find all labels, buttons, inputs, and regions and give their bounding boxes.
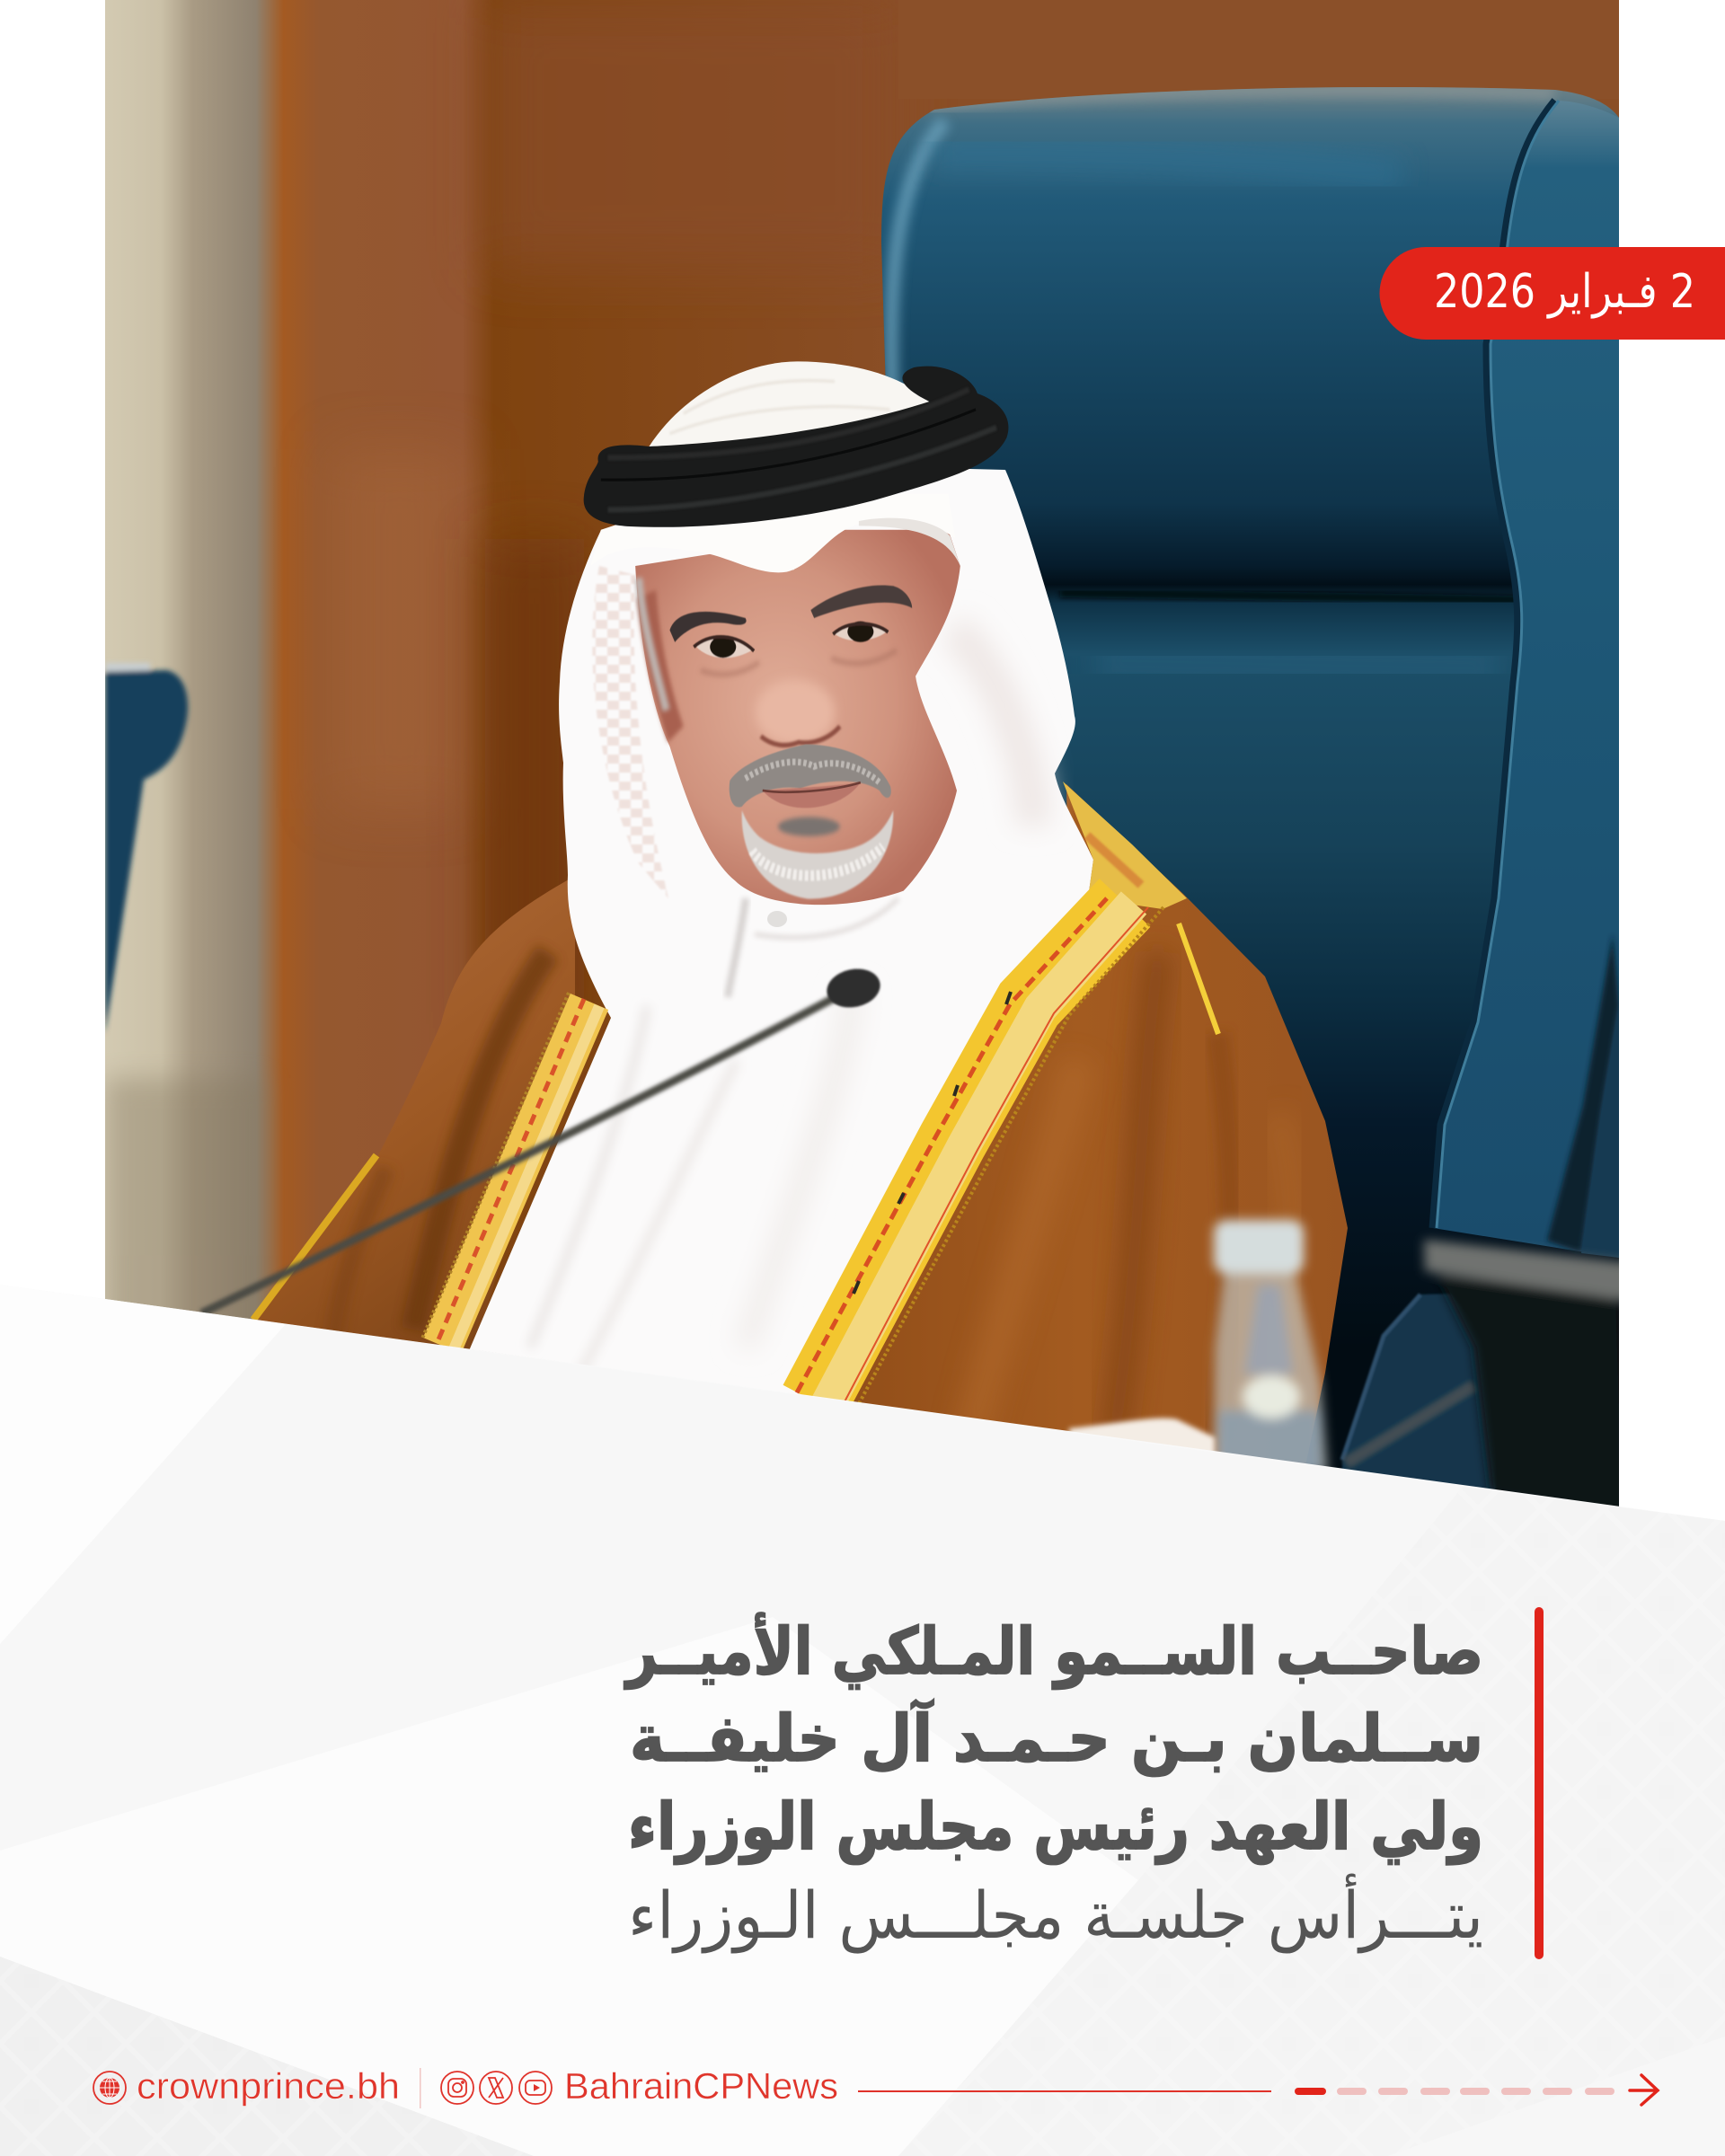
lower text panel: [0, 1285, 1725, 2156]
chair side panel and stitched seam: [1433, 101, 1619, 1258]
right eye: [833, 622, 888, 642]
left background chair arm: [105, 663, 188, 1033]
grey moustache: [730, 745, 891, 808]
gold trim, right side: [796, 782, 1187, 1410]
left eye: [694, 636, 754, 658]
white ghutra and thobe: [449, 467, 1093, 1455]
blue leather chair back: [881, 87, 1619, 1527]
face and head, drawn in zoomed local coordinates: [584, 361, 1008, 905]
eyebrows: [669, 612, 747, 642]
website: crownprince.bh: [137, 2065, 400, 2107]
soul patch: [778, 817, 840, 836]
footer bar: [93, 2065, 1658, 2108]
headline line 2: ســلمان بـن حـمـد آل خليفــة: [630, 1699, 1483, 1777]
left temple shadow and sideburn: [637, 590, 684, 742]
forehead ghutra fold: [600, 525, 951, 573]
microphone: [201, 964, 884, 1313]
lips: [763, 782, 861, 808]
skin: [635, 530, 960, 905]
headline block: [624, 1607, 1544, 1959]
wood and cream wall background: [105, 0, 1619, 1353]
icon: x: [480, 2072, 512, 2104]
lower chair section: [1342, 1294, 1496, 1491]
headline line 3: ولي العهد رئيس مجلس الوزراء: [628, 1789, 1483, 1865]
headline line 4: يتـــرأس جلسـة مجلـــس الـوزراء: [628, 1873, 1483, 1954]
black agal ring: [584, 367, 1008, 527]
nose: [756, 680, 835, 745]
date badge: [1380, 247, 1725, 340]
panel shards: [0, 1285, 286, 1644]
red accent bar: [1535, 1607, 1544, 1959]
date text: 2 فـبراير 2026: [1434, 265, 1695, 319]
photo: crown prince seated in blue chair: [105, 0, 1635, 1527]
page progress dashes: [1295, 2088, 1614, 2095]
white paper on table: [1069, 1418, 1215, 1473]
gold trim, left side: [422, 993, 599, 1349]
arrow: [1630, 2075, 1658, 2105]
white head dome: [649, 361, 929, 446]
dark monitor in foreground: [1424, 1240, 1631, 1518]
headline line 1: صاحــب الســمو المـلكي الأميــر: [624, 1612, 1483, 1690]
social handle: BahrainCPNews: [564, 2065, 838, 2107]
footer line: [858, 2090, 1271, 2092]
brown bisht robe, left side: [250, 880, 575, 1349]
icon: youtube: [519, 2072, 552, 2104]
water bottle, blurred: [1213, 1220, 1328, 1473]
under-eye shading: [701, 650, 897, 675]
white goatee: [742, 810, 893, 899]
icon: instagram: [441, 2072, 473, 2104]
brown bisht robe, right side: [854, 784, 1348, 1463]
icon: globe: [93, 2072, 126, 2104]
